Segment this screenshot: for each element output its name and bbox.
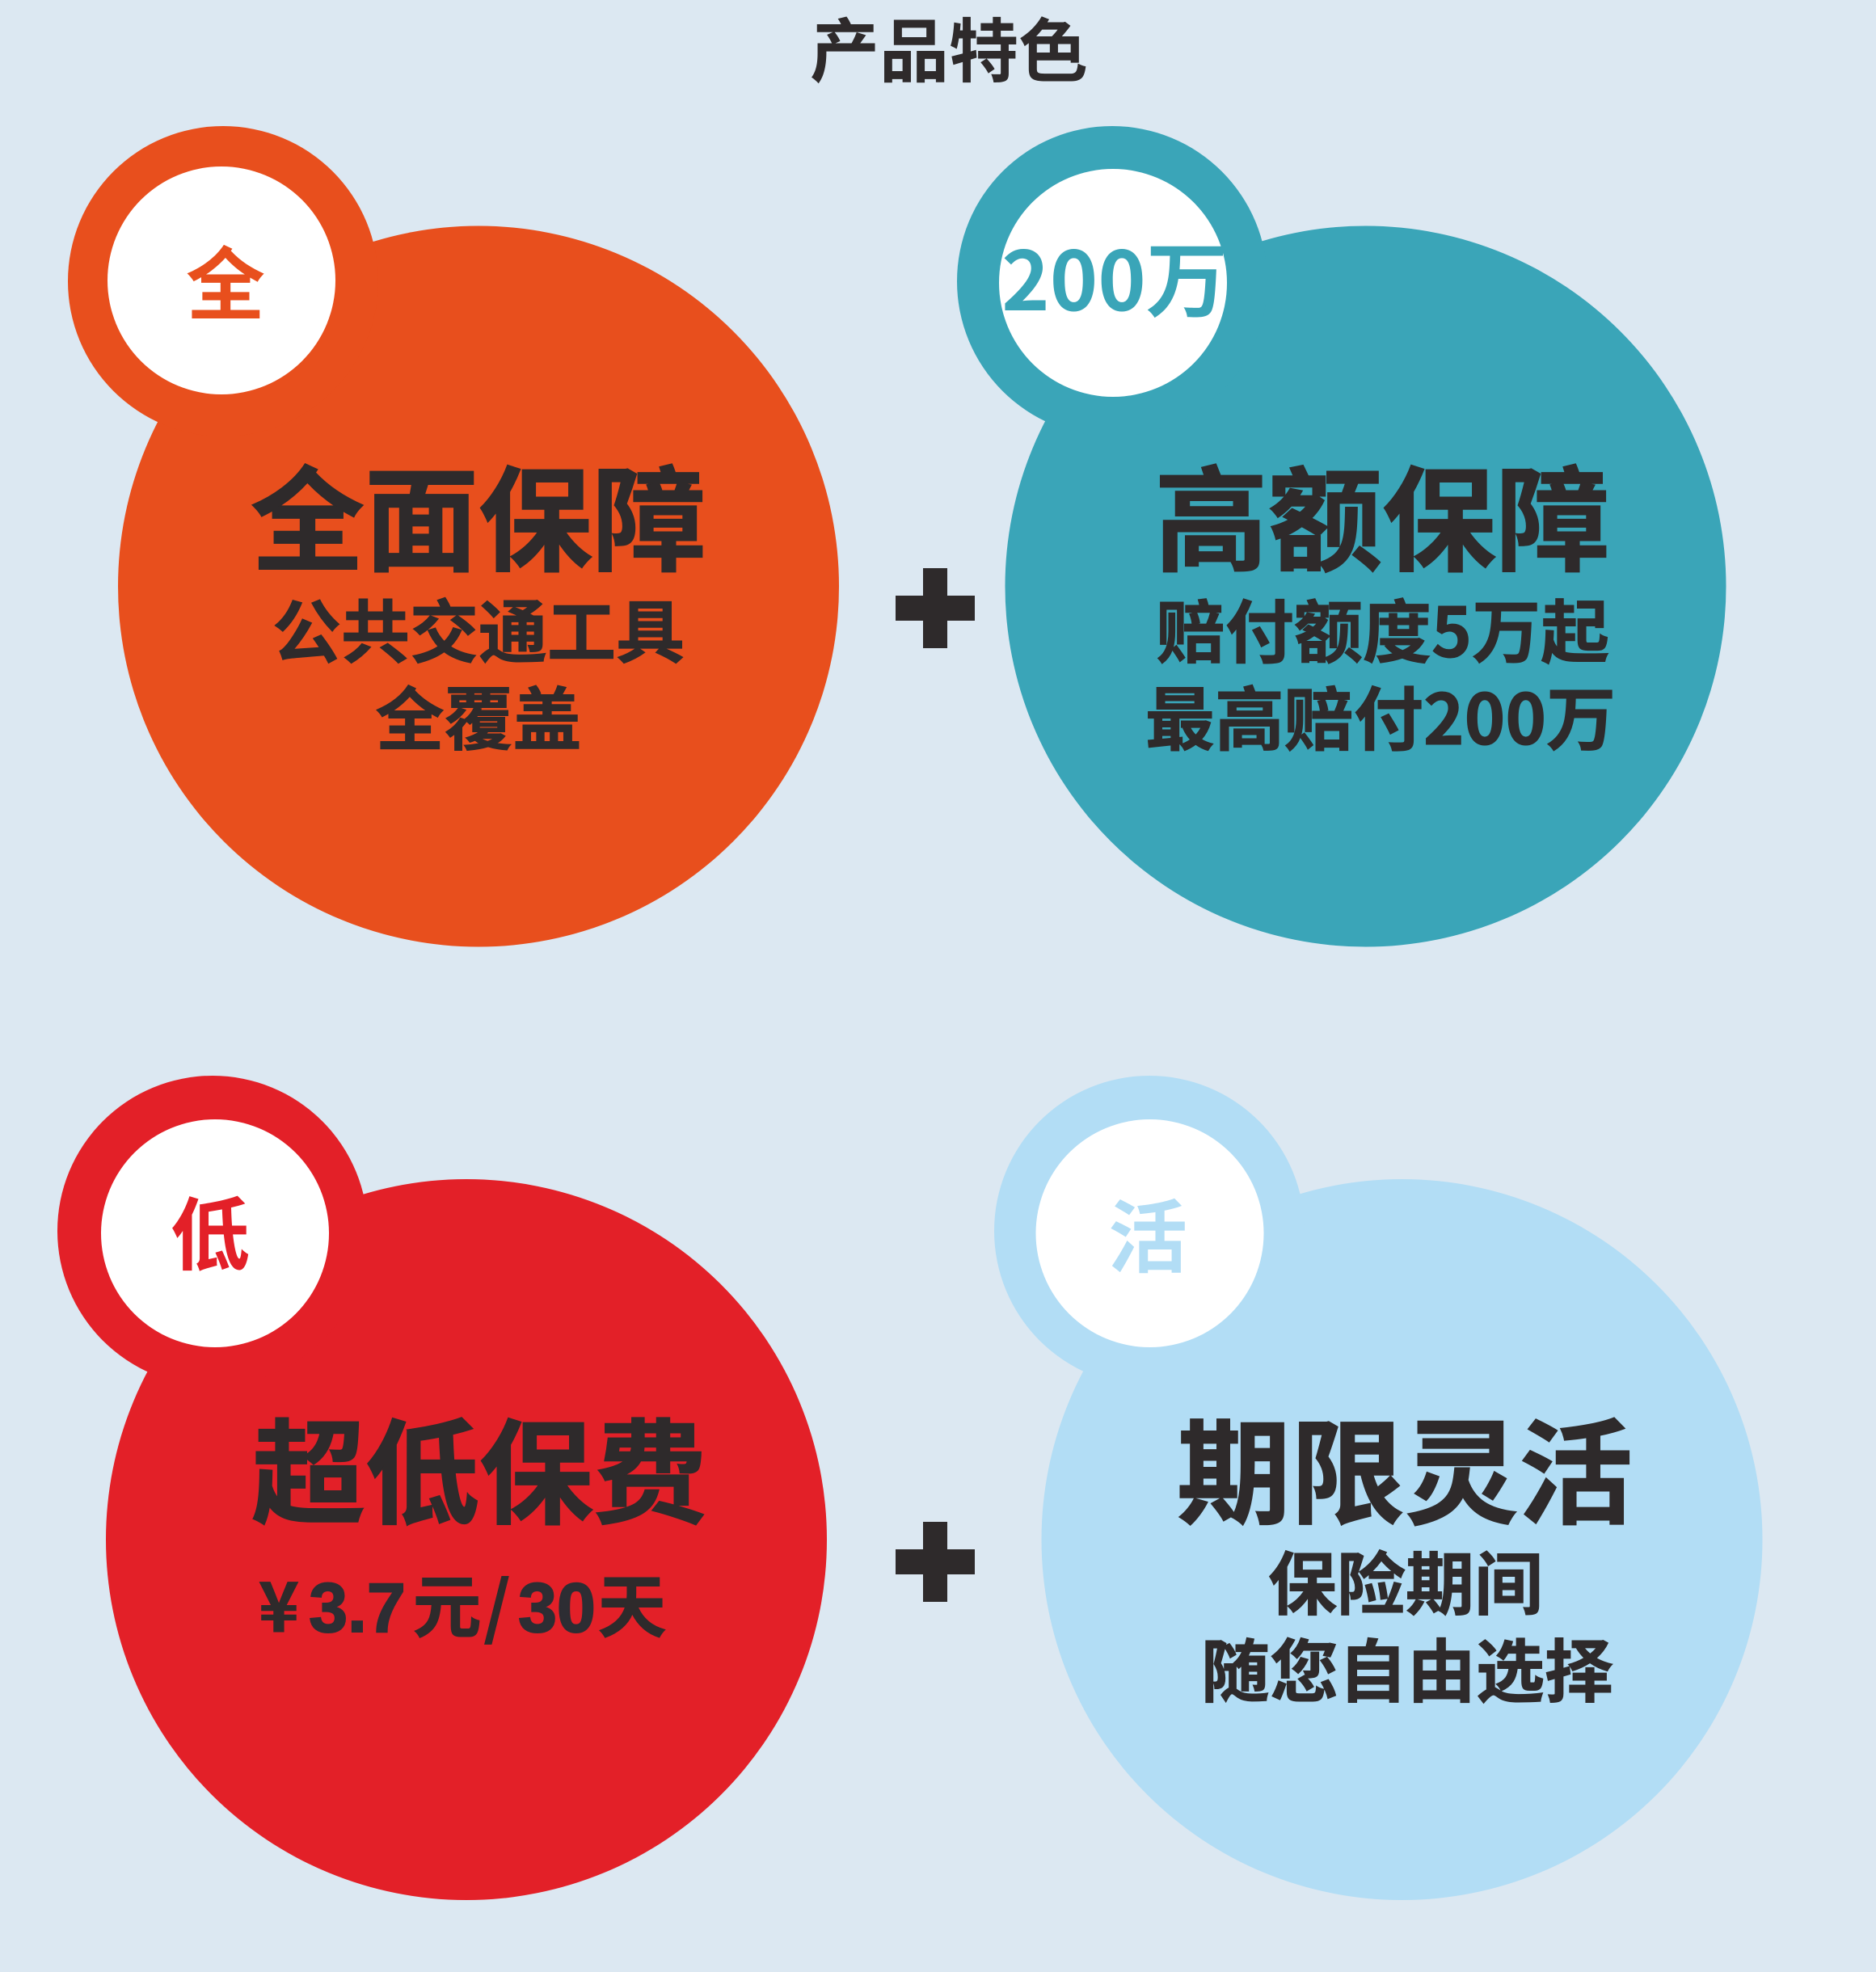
- badge: 活: [1036, 1119, 1264, 1347]
- light blue bubble: [994, 1076, 1762, 1900]
- heading: 全面保障: [251, 429, 706, 595]
- price: /: [484, 1553, 510, 1652]
- teal bubble: [957, 126, 1726, 947]
- heading: 超低保费: [251, 1382, 707, 1548]
- heading: 期限灵活: [1177, 1382, 1633, 1548]
- badge: 低: 低: [171, 1172, 250, 1287]
- description: 随您自由选择: [1201, 1617, 1613, 1717]
- panel: low premium: [57, 1076, 827, 1900]
- description: 公共交通工具: [272, 578, 685, 677]
- badge: 全: 全: [186, 221, 265, 336]
- panel: flexible term: [994, 1076, 1762, 1900]
- description: [1201, 1530, 1613, 1717]
- heading: 高额保障: [1154, 429, 1610, 595]
- price: 元: [412, 1553, 482, 1652]
- description: [1145, 578, 1616, 765]
- panel: comprehensive coverage: [68, 126, 839, 947]
- price: [259, 1553, 667, 1652]
- price: ¥: [259, 1553, 299, 1652]
- price: 天: [597, 1553, 667, 1652]
- badge: 全: [108, 166, 335, 394]
- description: [272, 578, 685, 765]
- plus sign: bottom: [896, 1522, 975, 1602]
- badge: 200万: [999, 169, 1228, 397]
- price: 3.7: [309, 1570, 406, 1647]
- description: 最高赔付200万: [1145, 664, 1616, 765]
- price: 30: [518, 1570, 596, 1647]
- description: 保险期间: [1268, 1530, 1543, 1629]
- orange bubble: [68, 126, 839, 947]
- panel: high coverage: [957, 126, 1726, 947]
- plus sign: top: [896, 568, 975, 648]
- badge: 200万: 200万: [1001, 217, 1228, 335]
- badge: 活: 活: [1108, 1174, 1187, 1289]
- red bubble: [57, 1076, 827, 1900]
- description: 赔付额度5万起: [1157, 578, 1609, 677]
- description: 全覆盖: [375, 665, 582, 765]
- badge: 低: [101, 1119, 329, 1347]
